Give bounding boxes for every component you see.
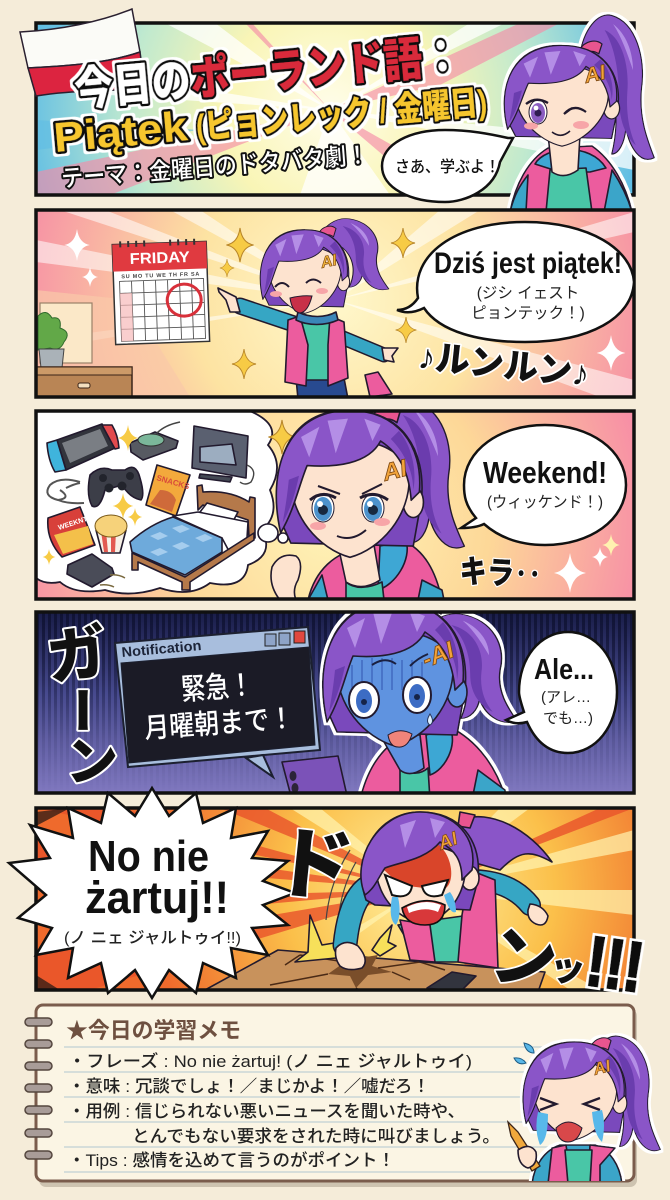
sound effect: don: ド [270, 817, 357, 913]
black box [67, 554, 125, 587]
plant [38, 312, 67, 368]
head: happy girl [260, 226, 350, 313]
speech bubble: Ale: (アレ… [541, 689, 591, 706]
angry face [385, 875, 456, 925]
snacks bag: SNACKS [155, 473, 191, 491]
speech bubble: Dzis jest piatek [397, 222, 634, 342]
notebook rings [25, 1018, 52, 1159]
cable [47, 480, 84, 503]
face [349, 654, 432, 747]
sound effect: runrun: ♪ルンルン♪ [416, 337, 591, 394]
speed rays [36, 808, 634, 990]
burst speech bubble: (ノ ニェ ジャルトゥイ!!) [64, 930, 241, 947]
memo text: とんでもない要求をされた時に叫びましょう。 [132, 1127, 500, 1146]
calendar: SU MO TU WE TH FR SA [121, 272, 199, 280]
speech bubble: let's learn: さあ、学ぶよ！ [395, 158, 500, 176]
title line 2 reading: (ピョンレック / 金曜日) [194, 84, 489, 147]
hair clip AI: AI [379, 454, 411, 487]
sound effect: gaan: ン [66, 734, 118, 792]
speech bubble: let's learn [382, 130, 513, 202]
speech bubble: Dzis jest piatek: ピョンテック！) [471, 304, 585, 322]
memo heading: ★今日の学習メモ [66, 1018, 241, 1043]
ponytail [580, 15, 654, 159]
notification window: Notification [121, 637, 202, 660]
sound effect: kira: キラ‥ [459, 553, 542, 593]
face: happy girl [270, 280, 328, 313]
burst speech bubble: No nie [88, 832, 209, 881]
hair clip AI: AI [318, 252, 339, 272]
memo text: ・Tips : 感情を込めて言うのがポイント！ [68, 1150, 395, 1170]
sound effect: gaan: ー [53, 686, 109, 734]
panel: weekend daydream [36, 400, 634, 600]
sound effect: don: !!! [582, 922, 648, 1007]
bed [130, 485, 255, 590]
notification window: 緊急！ [180, 669, 254, 707]
snacks bag [146, 465, 191, 516]
sound effect: gaan: ガ [42, 618, 111, 693]
speech bubble: Ale [506, 632, 617, 753]
sound effect: don: ン [486, 918, 562, 1000]
hair clip AI: AI [590, 1056, 614, 1079]
body: smirking girl [271, 540, 444, 600]
desk [205, 950, 545, 995]
sound effect: don [270, 817, 648, 1007]
speech bubble: Weekend [461, 425, 626, 545]
hair clip AI: AI [581, 61, 609, 88]
sparkles [43, 425, 142, 565]
calendar [112, 238, 210, 345]
game controller [88, 467, 143, 507]
speech bubble: Weekend: Weekend! [483, 455, 607, 490]
burst speech bubble [9, 788, 295, 998]
speech bubble: Dzis jest piatek: (ジシ イェスト [477, 285, 579, 302]
hair clip AI: AI [435, 828, 461, 855]
chips bag [48, 507, 95, 557]
character: crying girl with pencil [508, 1036, 660, 1184]
speech bubble: Weekend: (ウィッケンド！) [487, 493, 603, 511]
face: smirking girl [310, 484, 390, 538]
panel: title header [36, 23, 634, 195]
hoodie [532, 1145, 622, 1184]
hoodie [510, 146, 632, 212]
game console [47, 424, 119, 472]
sound effect: gaan [42, 618, 118, 792]
wall frame [40, 303, 92, 363]
sparkles [64, 228, 625, 379]
memo text: ・意味 : 冗談でしょ！／まじかよ！／嘘だろ！ [68, 1077, 430, 1096]
thought dots [257, 523, 288, 544]
neck [548, 135, 580, 176]
speech bubble: Ale: でも…) [543, 710, 593, 727]
pencil [508, 1122, 540, 1171]
notification window: 月曜朝まで！ [143, 703, 295, 744]
icon: Polish flag [20, 9, 145, 96]
notification window [115, 627, 320, 777]
phone on desk [427, 972, 476, 992]
gold sparkle [268, 420, 296, 454]
body: happy girl [218, 288, 398, 399]
panel: urgent notification [36, 596, 634, 800]
ponytail [589, 1036, 660, 1151]
memo shadow [39, 1009, 637, 1187]
sound effect: don: ッ [547, 945, 588, 991]
title line 2 word: Piątek [52, 102, 190, 161]
thought cloud [36, 411, 277, 594]
panel: no way desk slam [36, 808, 634, 995]
angry girl head [361, 812, 552, 924]
speech bubble: Ale: Ale... [534, 654, 594, 686]
cabinet [36, 367, 132, 399]
motion lines [326, 850, 356, 925]
white sparkles [554, 534, 620, 593]
popcorn bucket [95, 515, 127, 553]
head [523, 1038, 627, 1140]
character: winking girl [504, 15, 654, 212]
calendar: FRIDAY [129, 249, 191, 268]
monitor [192, 426, 254, 484]
head: smirking girl [276, 404, 423, 557]
theme text: テーマ：金曜日のドタバタ劇！ [60, 142, 370, 193]
chips bag: WEEKNT [57, 516, 89, 532]
memo text: ・フレーズ : No nie żartuj! (ノ ニェ ジャルトゥイ) [68, 1051, 472, 1071]
face [524, 100, 589, 135]
memo text [68, 1051, 500, 1170]
tears and face [536, 1098, 604, 1145]
room wall [38, 290, 120, 366]
impact star [295, 915, 396, 962]
hood lining [535, 150, 606, 172]
sweat drops [514, 1043, 534, 1064]
angry girl body [336, 870, 548, 970]
hair clip AI: -AI [418, 636, 459, 674]
panel: study memo [25, 1005, 637, 1187]
burst speech bubble: żartuj!! [85, 872, 229, 923]
panel: Friday calendar [36, 210, 634, 399]
t-shirt [546, 168, 592, 212]
shocked girl [323, 596, 517, 800]
head [504, 41, 620, 146]
console accessory [130, 422, 180, 460]
memo text: ・用例 : 信じられない悪いニュースを聞いた時や、 [68, 1102, 465, 1121]
title line 1: 今日のポーランド語： [72, 29, 463, 116]
ponytail: smirking girl [390, 412, 466, 549]
memo sheet [36, 1005, 634, 1181]
speech bubble: Dzis jest piatek: Dziś jest piątek! [434, 247, 622, 280]
phone [282, 756, 348, 800]
sleeve [510, 170, 632, 212]
ponytail: happy girl [320, 219, 389, 290]
